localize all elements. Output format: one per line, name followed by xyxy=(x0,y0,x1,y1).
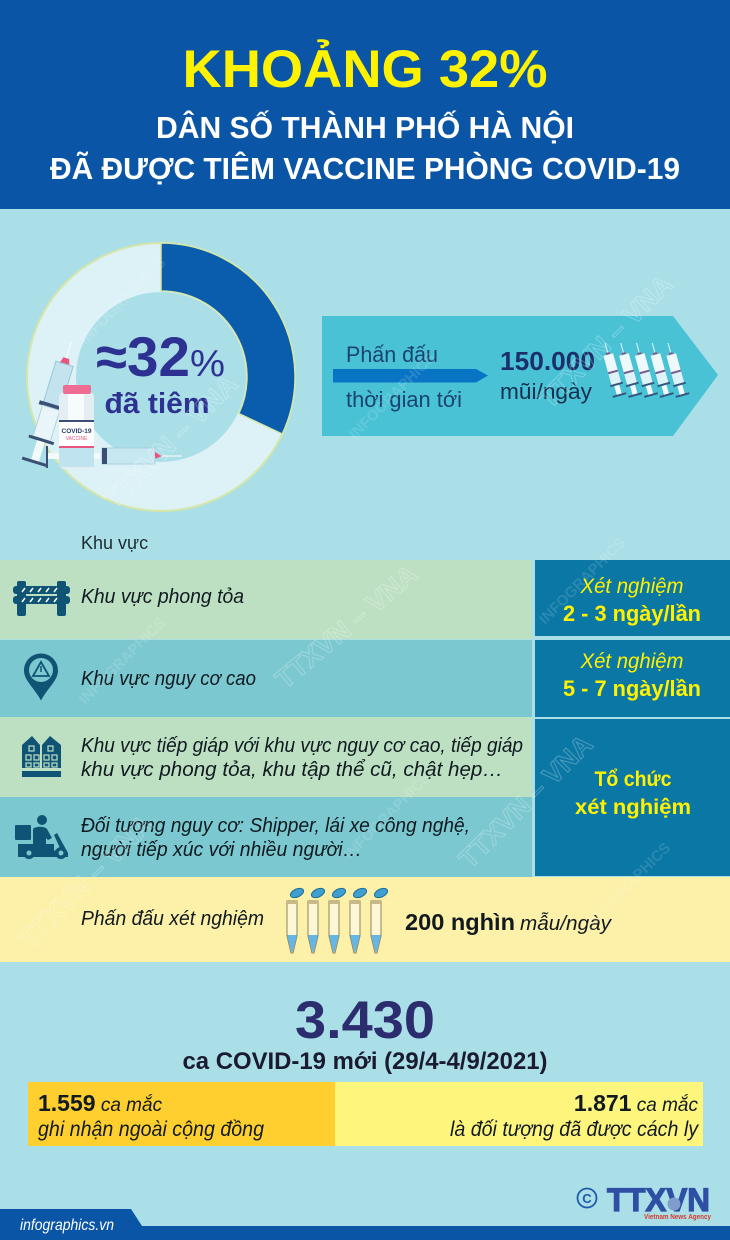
donut chart: 32% vaccinated xyxy=(27,243,295,511)
panel: target arrow xyxy=(322,316,718,436)
title: subtitle line 1: DÂN SỐ THÀNH PHỐ HÀ NỘI xyxy=(156,109,574,145)
icon: barrier xyxy=(13,581,70,616)
icon: vaccine vial and syringes xyxy=(22,338,182,469)
icon: five syringes xyxy=(598,341,689,398)
text: quarantined cases: 1.871 ca mắc xyxy=(574,1090,698,1116)
panel: high risk row xyxy=(0,640,532,717)
title: main headline: KHOẢNG 32% xyxy=(182,39,548,99)
text: TTXVN – VNA xyxy=(98,369,243,514)
text: TTXVN – VNA xyxy=(13,809,158,954)
arrow: timeline bar xyxy=(333,369,488,382)
stat: total new cases xyxy=(182,991,548,1075)
panel: quarantined cases: là đối tượng đã được cách ly xyxy=(450,1118,699,1141)
logo: TTXVN: Vietnam News Agency xyxy=(644,1212,712,1221)
icon: vaccine vial and syringes: VACCINE xyxy=(66,436,88,442)
icon: apartment blocks xyxy=(22,736,61,777)
text: TTXVN – VNA xyxy=(453,729,598,874)
text: samples per day xyxy=(405,909,612,935)
text: doses per day unit: mũi/ngày xyxy=(500,379,592,404)
panel: adjacent areas row xyxy=(0,717,532,797)
text: testing interval: 5 - 7 ngày/lần xyxy=(563,676,701,701)
icon: vaccine vial and syringes: COVID-19 xyxy=(62,428,92,435)
text: website: infographics.vn xyxy=(20,1217,114,1234)
footer bar xyxy=(0,1209,730,1240)
text: TTXVN – VNA xyxy=(270,559,423,695)
icon: warning pin xyxy=(24,654,58,700)
text: samples per day: 200 nghìn xyxy=(405,909,515,935)
panel: community cases: ghi nhận ngoài cộng đồng xyxy=(38,1118,264,1141)
panel: testing frequency lockdown xyxy=(535,560,730,636)
text: INFOGRAPHICS xyxy=(76,614,169,708)
donut value: % xyxy=(190,343,225,385)
text: community cases: 1.559 ca mắc xyxy=(38,1090,163,1116)
panel: testing target xyxy=(0,877,730,962)
text: organise testing: xét nghiệm xyxy=(575,796,691,819)
panel: community cases xyxy=(28,1082,335,1146)
panel: organise testing xyxy=(535,719,730,876)
panel: quarantined cases xyxy=(335,1082,703,1146)
donut caption: đã tiêm xyxy=(104,388,210,420)
text: INFOGRAPHICS xyxy=(76,254,169,348)
text: INFOGRAPHICS xyxy=(346,349,439,443)
panel: at-risk people row xyxy=(0,797,532,877)
text: high risk area: Khu vực nguy cơ cao xyxy=(81,668,256,690)
text: area column heading: Khu vực xyxy=(81,533,148,553)
text: INFOGRAPHICS xyxy=(341,769,434,863)
text: organise testing: Tổ chức xyxy=(594,768,672,791)
text: coming period: thời gian tới xyxy=(346,387,462,412)
text: adjacent areas description: khu vực phong tỏa, khu tập thể cũ, chật hẹp… xyxy=(81,759,503,781)
text: lockdown area: Khu vực phong tỏa xyxy=(81,586,244,608)
text: adjacent areas description xyxy=(81,735,523,781)
text: samples per day: mẫu/ngày xyxy=(520,912,612,935)
text: organise testing xyxy=(575,768,691,819)
header banner xyxy=(0,0,730,209)
text: at-risk people description: Đối tượng nguy cơ: Shipper, lái xe công nghệ, xyxy=(81,815,470,837)
text: testing label: Xét nghiệm xyxy=(580,575,684,598)
text: testing label: Xét nghiệm xyxy=(580,650,684,673)
text: at-risk people description xyxy=(81,815,470,861)
text: at-risk people description: người tiếp xúc với nhiều người… xyxy=(81,839,362,861)
text: testing target label: Phấn đấu xét nghiệm xyxy=(81,908,264,930)
icon: delivery scooter xyxy=(15,815,68,859)
text: new cases caption: ca COVID-19 mới (29/4-4/9/2021) xyxy=(182,1048,548,1075)
text: INFOGRAPHICS xyxy=(536,534,629,628)
donut value: ≈32 xyxy=(96,325,190,388)
title: subtitle line 2: ĐÃ ĐƯỢC TIÊM VACCINE PHÒNG COVID-19 xyxy=(50,150,680,186)
text: adjacent areas description: Khu vực tiếp giáp với khu vực nguy cơ cao, tiếp giáp xyxy=(81,735,523,757)
text: testing interval: 2 - 3 ngày/lần xyxy=(563,601,701,626)
icon: five test tubes xyxy=(287,886,389,953)
panel: lockdown row xyxy=(0,560,532,639)
stat: total new cases: 3.430 xyxy=(295,991,435,1050)
logo: TTXVN: C xyxy=(582,1191,592,1206)
logo: TTXVN: TTXVN xyxy=(607,1182,710,1218)
text: striving label: Phấn đấu xyxy=(346,342,438,367)
text: INFOGRAPHICS xyxy=(581,839,674,933)
text: doses per day value: 150.000 xyxy=(500,346,595,376)
panel: testing frequency high risk xyxy=(535,640,730,717)
text: TTXVN – VNA xyxy=(533,269,678,414)
